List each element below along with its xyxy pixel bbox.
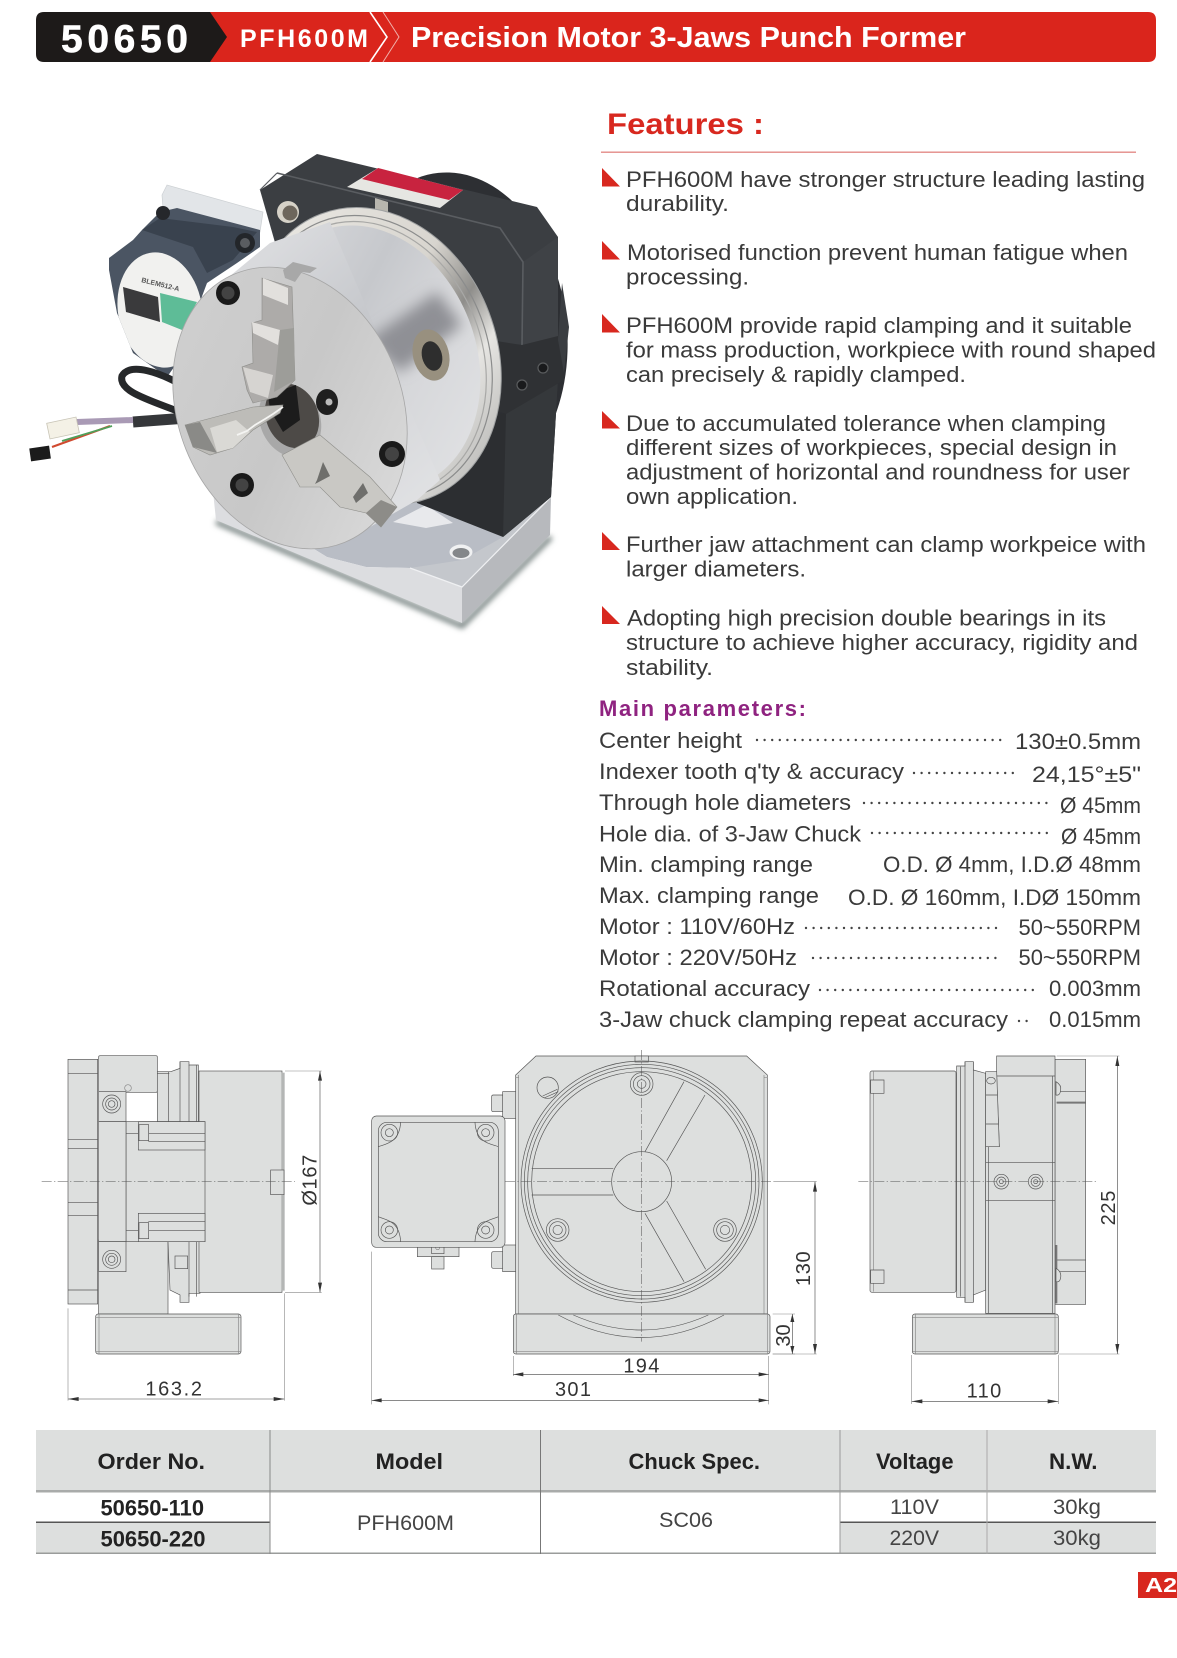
mounting blocks with screws [99,1092,126,1272]
parameter: indexer: 24,15°±5" [1032,762,1141,787]
main parameters heading: Main parameters: [599,696,806,721]
base block [912,1314,1058,1354]
parameter: rotational accuracy: 0.003mm [1049,976,1141,1001]
parameter: max clamping [599,883,1141,910]
feature 2 [602,240,1128,290]
table fills [36,1430,1156,1553]
product title: Precision Motor 3-Jaws Punch Former [411,22,966,54]
feature 6: Adopting high precision double bearings in its [627,606,1106,630]
dimension 30 [773,1314,795,1354]
upper jaw [242,262,317,403]
motor stubs [492,1092,516,1272]
table order numbers [100,1496,206,1552]
base block [96,1314,241,1354]
parameter: motor 220V: Motor : 220V/50Hz [599,945,797,970]
feature 5: Further jaw attachment can clamp workpeice with [626,532,1146,557]
centre line [42,1180,295,1182]
front drawing: centre view [372,1050,817,1404]
rear plate [1055,1059,1086,1304]
parameter: center height [599,728,1141,754]
header chevrons [370,12,399,62]
stepper motor: BLEM512-A [141,277,180,293]
model name: PFH600M [240,25,368,53]
parameter: motor 110V [599,914,1141,940]
chuck screws [546,1073,736,1241]
chuck body [222,193,518,543]
aluminium rail [162,185,263,232]
chuck face [132,232,448,584]
feature 4: own application. [626,484,798,509]
lower body [99,1240,168,1314]
motor plate [372,1116,505,1269]
parameter: max clamping: Max. clamping range [599,883,819,908]
parameter: indexer: Indexer tooth q'ty & accuracy [599,759,904,784]
header banner [36,12,1156,62]
parameter: max clamping: O.D. Ø 160mm, I.DØ 150mm [848,885,1141,910]
dimension 301 [372,1252,769,1404]
parameter: chuck hole: Hole dia. of 3-Jaw Chuck [599,822,862,846]
table header labels: Chuck Spec. [628,1449,760,1474]
feature 3: for mass production, workpiece with round shaped [626,338,1156,362]
parameter: center height: 130±0.5mm [1015,729,1141,754]
parameter: rotational accuracy [599,976,1141,1001]
black indexer body [260,154,558,345]
table header labels: Model [376,1449,443,1474]
feature 1: PFH600M have stronger structure leading lasting [626,167,1145,192]
feature 4 [602,411,1131,509]
parameter: min clamping: Min. clamping range [599,852,813,877]
parameter: indexer [599,759,1141,787]
dimension 110 [912,1355,1058,1404]
parameter: rotational accuracy: Rotational accuracy [599,976,810,1001]
chuck jaws [126,1122,205,1242]
dimension 167 [285,1071,322,1292]
features heading: Features : [607,108,764,141]
centre bore [248,374,332,466]
feature 4: adjustment of horizontal and roundness for user [626,460,1131,484]
table header labels [98,1449,1098,1474]
table voltage: 220V [890,1527,939,1550]
dimension 301: 301 [555,1379,592,1401]
side drawing: left view [42,1056,322,1401]
header black tab [36,12,227,62]
centre lines [505,1050,773,1342]
features rule [601,152,1136,153]
face screws [216,281,405,497]
lower block [400,283,569,537]
mounting flange [207,170,543,542]
main body [986,1056,1055,1313]
parameter: min clamping: O.D. Ø 4mm, I.D.Ø 48mm [883,852,1141,877]
dimension 30: 30 [773,1324,795,1347]
feature 1 [602,167,1145,216]
chuck cylinder [870,1071,956,1292]
chuck circles [521,1061,762,1302]
rear disc [327,161,583,503]
dimension 110: 110 [967,1380,1003,1402]
parameter: motor 110V: Motor : 110V/60Hz [599,914,795,939]
parameter: through hole: Ø 45mm [1060,793,1141,818]
parameter: min clamping [599,852,1141,877]
dimension 130 [773,1182,817,1354]
table chuck spec: SC06 [659,1509,713,1532]
rail post hole [277,201,299,223]
body bolts [994,1174,1043,1189]
parameter: center height: Center height [599,728,742,753]
order table [36,1430,1156,1554]
parameters list [599,728,1141,1032]
parameter: chuck hole [599,822,1141,849]
dimension 194: 194 [623,1356,661,1378]
table rules [36,1430,1156,1554]
dimension 225: 225 [1098,1190,1120,1225]
stepper motor [109,206,260,377]
features list [602,167,1156,680]
dimension 163.2 [68,1293,284,1401]
product photo [29,154,583,626]
feature 4: different sizes of workpieces, special design in [626,435,1117,460]
parameter: repeat accuracy: 3-Jaw chuck clamping repeat accuracy [599,1007,1008,1032]
dimension 163.2: 163.2 [145,1378,204,1400]
flange stack [957,1062,986,1302]
left jaw [185,405,283,455]
table header labels: Order No. [98,1449,205,1474]
parameter: through hole: Through hole diameters [599,790,851,815]
indexer body [516,1056,767,1314]
parameter: repeat accuracy [599,1007,1141,1032]
feature 6 [602,606,1138,680]
dimension 130: 130 [793,1251,815,1286]
table weight: 30kg [1053,1496,1101,1519]
header red bar [200,12,1156,62]
table header labels: Voltage [876,1449,954,1474]
feature 5: larger diameters. [626,556,806,582]
parameter: motor 220V [599,945,1141,970]
feature 6: stability. [626,655,713,680]
lower right jaw [282,435,397,527]
feature 2: processing. [626,264,749,290]
table order numbers: 50650-220 [100,1526,206,1552]
feature 4: Due to accumulated tolerance when clamping [626,411,1106,436]
jaw slots [532,1082,706,1282]
feature 1: durability. [626,191,729,216]
rear plate [68,1059,98,1304]
page number badge [1138,1572,1177,1598]
dimension 194 [513,1356,769,1404]
parameter: repeat accuracy: 0.015mm [1049,1007,1141,1032]
table model: PFH600M [357,1512,454,1535]
dimension 167: Ø167 [300,1154,322,1206]
feature 2: Motorised function prevent human fatigue when [627,240,1128,265]
dimension 225 [1057,1056,1120,1354]
table weight [1053,1496,1101,1550]
order number: 50650 [61,18,188,61]
parameter: motor 110V: 50~550RPM [1018,915,1141,940]
chuck cylinder [199,1071,285,1292]
feature 5 [602,532,1146,582]
red nameplate [347,168,463,220]
parameter: through hole [599,790,1141,818]
base block [513,1314,770,1354]
photo shadow [216,522,551,626]
parameter: chuck hole: Ø 45mm [1061,824,1141,849]
feature 6: structure to achieve higher accuracy, rigidity and [626,630,1138,655]
side drawing: right view [858,1056,1120,1404]
table order numbers: 50650-110 [100,1496,204,1520]
table weight: 30kg [1053,1527,1101,1550]
table voltage: 110V [890,1496,939,1519]
small plug [537,1077,558,1098]
flange stack [125,1062,200,1302]
centre line [858,1181,1097,1183]
power cable and connectors [29,369,187,461]
upper body [99,1056,157,1092]
feature 3: can precisely & rapidly clamped. [626,362,966,387]
parameter: motor 220V: 50~550RPM [1018,945,1141,970]
table header labels: N.W. [1049,1449,1098,1474]
steel base [212,482,551,623]
feature 3: PFH600M provide rapid clamping and it suitable [626,313,1132,338]
plate details [68,1073,98,1290]
feature 3 [602,313,1156,387]
table voltage [890,1496,939,1550]
